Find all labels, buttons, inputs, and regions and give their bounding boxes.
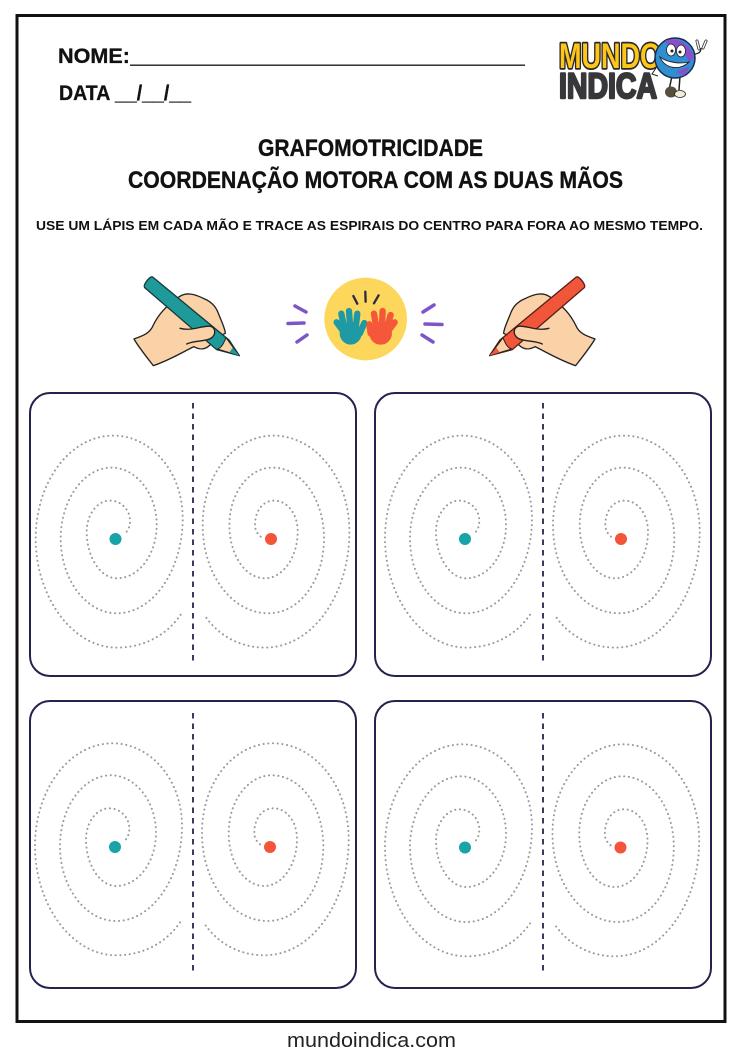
right rays bbox=[422, 305, 442, 342]
red hand bbox=[369, 311, 395, 342]
instruction text: USE UM LÁPIS EM CADA MÃO E TRACE AS ESPIRAIS DO CENTRO PARA FORA AO MESMO TEMPO. bbox=[36, 218, 703, 233]
teal start dot bbox=[459, 533, 471, 545]
left rays bbox=[288, 306, 307, 342]
panel: spirals top left bbox=[30, 393, 356, 676]
logo globe mascot bbox=[652, 38, 706, 98]
yellow circle with hands bbox=[324, 278, 407, 360]
logo wordmark: MUNDO bbox=[559, 37, 661, 76]
teal start dot bbox=[109, 841, 121, 853]
illustration: right hand with red pencil bbox=[490, 277, 595, 366]
panel: spirals bottom left bbox=[30, 701, 356, 988]
logo wordmark: INDICA bbox=[559, 67, 657, 106]
red start dot bbox=[615, 533, 627, 545]
panel: spirals top right bbox=[375, 393, 711, 676]
illustration: two hands badge with rays bbox=[288, 278, 442, 360]
date field: DATA __/__/__ bbox=[59, 82, 191, 105]
logo: Mundo Indica bbox=[559, 37, 706, 106]
title: GRAFOMOTRICIDADE bbox=[258, 135, 483, 162]
red start dot bbox=[265, 533, 277, 545]
illustration: left hand with teal pencil bbox=[134, 277, 239, 366]
title: COORDENAÇÃO MOTORA COM AS DUAS MÃOS bbox=[128, 166, 623, 194]
title bbox=[128, 135, 623, 194]
name field: NOME: bbox=[58, 45, 130, 68]
teal start dot bbox=[459, 842, 471, 854]
teal start dot bbox=[110, 533, 122, 545]
red start dot bbox=[264, 841, 276, 853]
panel: spirals bottom right bbox=[375, 701, 711, 988]
logo wordmark bbox=[559, 37, 661, 106]
red start dot bbox=[614, 842, 626, 854]
teal hand bbox=[337, 311, 364, 342]
